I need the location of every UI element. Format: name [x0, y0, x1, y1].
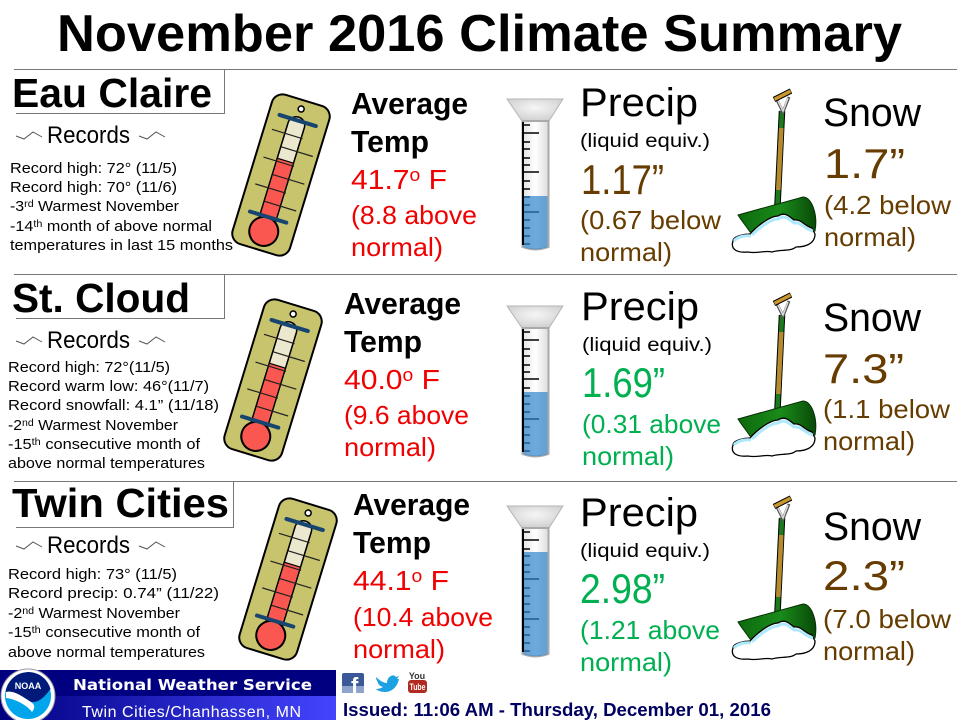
records list: Warmest November: [34, 605, 180, 622]
temperature block: Temp: [344, 324, 422, 359]
icon: snow shovel: [732, 498, 816, 660]
records list: [8, 359, 219, 472]
records list: Warmest November: [34, 198, 179, 215]
records heading: Records: [47, 327, 130, 354]
panel: Eau Claire: [10, 70, 957, 267]
precipitation block: [580, 81, 721, 267]
temperature block: o: [412, 566, 422, 586]
icon: YouTube: Tube: [410, 682, 426, 692]
temperature block: 44.1: [353, 565, 408, 596]
records list: -14: [10, 218, 32, 235]
agency name: National Weather Service: [73, 676, 312, 694]
icon: NOAA logo: NOAA: [15, 681, 42, 691]
records list: Warmest November: [34, 417, 178, 434]
snow block: 2.3”: [823, 552, 905, 599]
snow block: normal): [823, 636, 915, 666]
records list: Record high: 70° (11/6): [10, 179, 177, 196]
temperature block: Temp: [353, 525, 431, 560]
panel: Twin Cities: [8, 480, 957, 677]
snow block: normal): [823, 426, 915, 456]
records heading: Records: [47, 532, 130, 559]
city box: Eau Claire: [14, 70, 957, 114]
records list: temperatures in last 15 months: [10, 237, 233, 254]
records list: Record high: 73° (11/5): [8, 566, 177, 583]
precipitation block: (liquid equiv.): [582, 335, 712, 356]
temperature block: 41.7: [351, 164, 406, 195]
precipitation block: (liquid equiv.): [580, 541, 710, 562]
precipitation block: Precip: [580, 81, 698, 125]
temperature block: Average: [351, 86, 468, 121]
temperature block: Average: [353, 487, 470, 522]
precipitation block: (liquid equiv.): [580, 131, 710, 152]
records list: [8, 566, 219, 661]
icon: Facebook: [342, 673, 364, 698]
temperature block: F: [422, 565, 449, 596]
records list: -2: [8, 417, 21, 434]
heading: St. Cloud: St. Cloud: [12, 275, 190, 321]
precipitation block: Precip: [580, 491, 698, 535]
icon: rain gauge: [507, 506, 563, 656]
snow block: Snow: [823, 91, 921, 135]
records list: Record warm low: 46°(11/7): [8, 378, 209, 395]
icon: rain gauge: [507, 99, 563, 250]
precipitation block: (0.67 below: [580, 205, 721, 235]
snow block: 1.7”: [824, 140, 905, 187]
records list: nd: [22, 606, 34, 617]
snow block: (4.2 below: [824, 190, 951, 220]
icon: NOAA logo: [1, 669, 55, 720]
city box: Twin Cities: [14, 482, 957, 528]
records list: Record high: 72°(11/5): [8, 359, 170, 376]
temperature block: normal): [344, 432, 436, 462]
precipitation block: [581, 285, 721, 471]
records heading: [16, 327, 165, 354]
icon: Facebook: f: [351, 673, 359, 698]
temperature block: (8.8 above: [351, 200, 477, 230]
precipitation block: normal): [582, 441, 674, 471]
precipitation block: 1.69”: [582, 359, 665, 406]
icon: thermometer: [230, 92, 332, 258]
temperature block: F: [413, 364, 440, 395]
icon: thermometer: [237, 496, 339, 662]
icon: rain gauge: [507, 306, 563, 456]
records list: month of above normal: [42, 218, 212, 235]
records heading: [16, 532, 165, 559]
issued timestamp: Issued: 11:06 AM - Thursday, December 01, 2016: [343, 700, 771, 720]
temperature block: [353, 487, 493, 664]
records list: Record snowfall: 4.1” (11/18): [8, 397, 219, 414]
icon: YouTube: [408, 671, 427, 693]
icon: snow shovel: [732, 91, 816, 253]
precipitation block: normal): [580, 647, 672, 677]
records list: Record high: 72° (11/5): [10, 160, 177, 177]
temperature block: [351, 86, 477, 262]
snow block: Snow: [823, 296, 921, 340]
temperature block: [344, 286, 469, 462]
records heading: [16, 122, 165, 149]
precipitation block: [580, 491, 720, 677]
records list: -15: [8, 624, 30, 641]
temperature block: (10.4 above: [353, 602, 493, 632]
records list: -2: [8, 605, 21, 622]
snow block: 7.3”: [823, 345, 904, 392]
records heading: Records: [47, 122, 130, 149]
precipitation block: 2.98”: [580, 565, 665, 612]
precipitation block: (0.31 above: [582, 409, 721, 439]
precipitation block: Precip: [581, 285, 699, 329]
temperature block: (9.6 above: [344, 400, 469, 430]
records list: th: [33, 219, 42, 230]
heading: Twin Cities: Twin Cities: [12, 480, 229, 526]
temperature block: normal): [351, 232, 443, 262]
footer banner: [0, 670, 336, 720]
records list: -15: [8, 436, 30, 453]
temperature block: o: [410, 165, 420, 185]
snow block: (7.0 below: [823, 604, 951, 634]
temperature block: Average: [344, 286, 461, 321]
records list: consecutive month of: [41, 624, 201, 641]
records list: th: [32, 625, 41, 636]
snow block: [823, 505, 951, 666]
icon: thermometer: [222, 297, 324, 463]
icon: YouTube: You: [409, 671, 425, 681]
temperature block: 40.0: [344, 364, 398, 395]
temperature block: Temp: [351, 124, 429, 159]
records list: rd: [24, 199, 34, 210]
records list: [10, 160, 233, 254]
temperature block: F: [420, 164, 447, 195]
records list: consecutive month of: [41, 436, 201, 453]
records list: nd: [22, 418, 34, 429]
icon: snow shovel: [732, 295, 816, 457]
heading: Eau Claire: Eau Claire: [12, 70, 212, 116]
records list: above normal temperatures: [8, 455, 205, 472]
snow block: [823, 296, 950, 456]
city box: St. Cloud: [14, 274, 957, 318]
icon: Twitter: [376, 675, 399, 692]
temperature block: o: [403, 365, 413, 385]
precipitation block: (1.21 above: [580, 615, 720, 645]
snow block: [823, 91, 951, 252]
snow block: Snow: [823, 505, 921, 549]
snow block: normal): [824, 222, 916, 252]
snow block: (1.1 below: [823, 394, 950, 424]
precipitation block: normal): [580, 237, 672, 267]
panel: St. Cloud: [8, 274, 957, 472]
records list: th: [32, 437, 41, 448]
records list: Record precip: 0.74” (11/22): [8, 585, 219, 602]
temperature block: normal): [353, 634, 445, 664]
records list: -3: [10, 198, 23, 215]
precipitation block: 1.17”: [581, 156, 664, 203]
title: November 2016 Climate Summary: [57, 5, 902, 63]
records list: above normal temperatures: [8, 644, 205, 661]
